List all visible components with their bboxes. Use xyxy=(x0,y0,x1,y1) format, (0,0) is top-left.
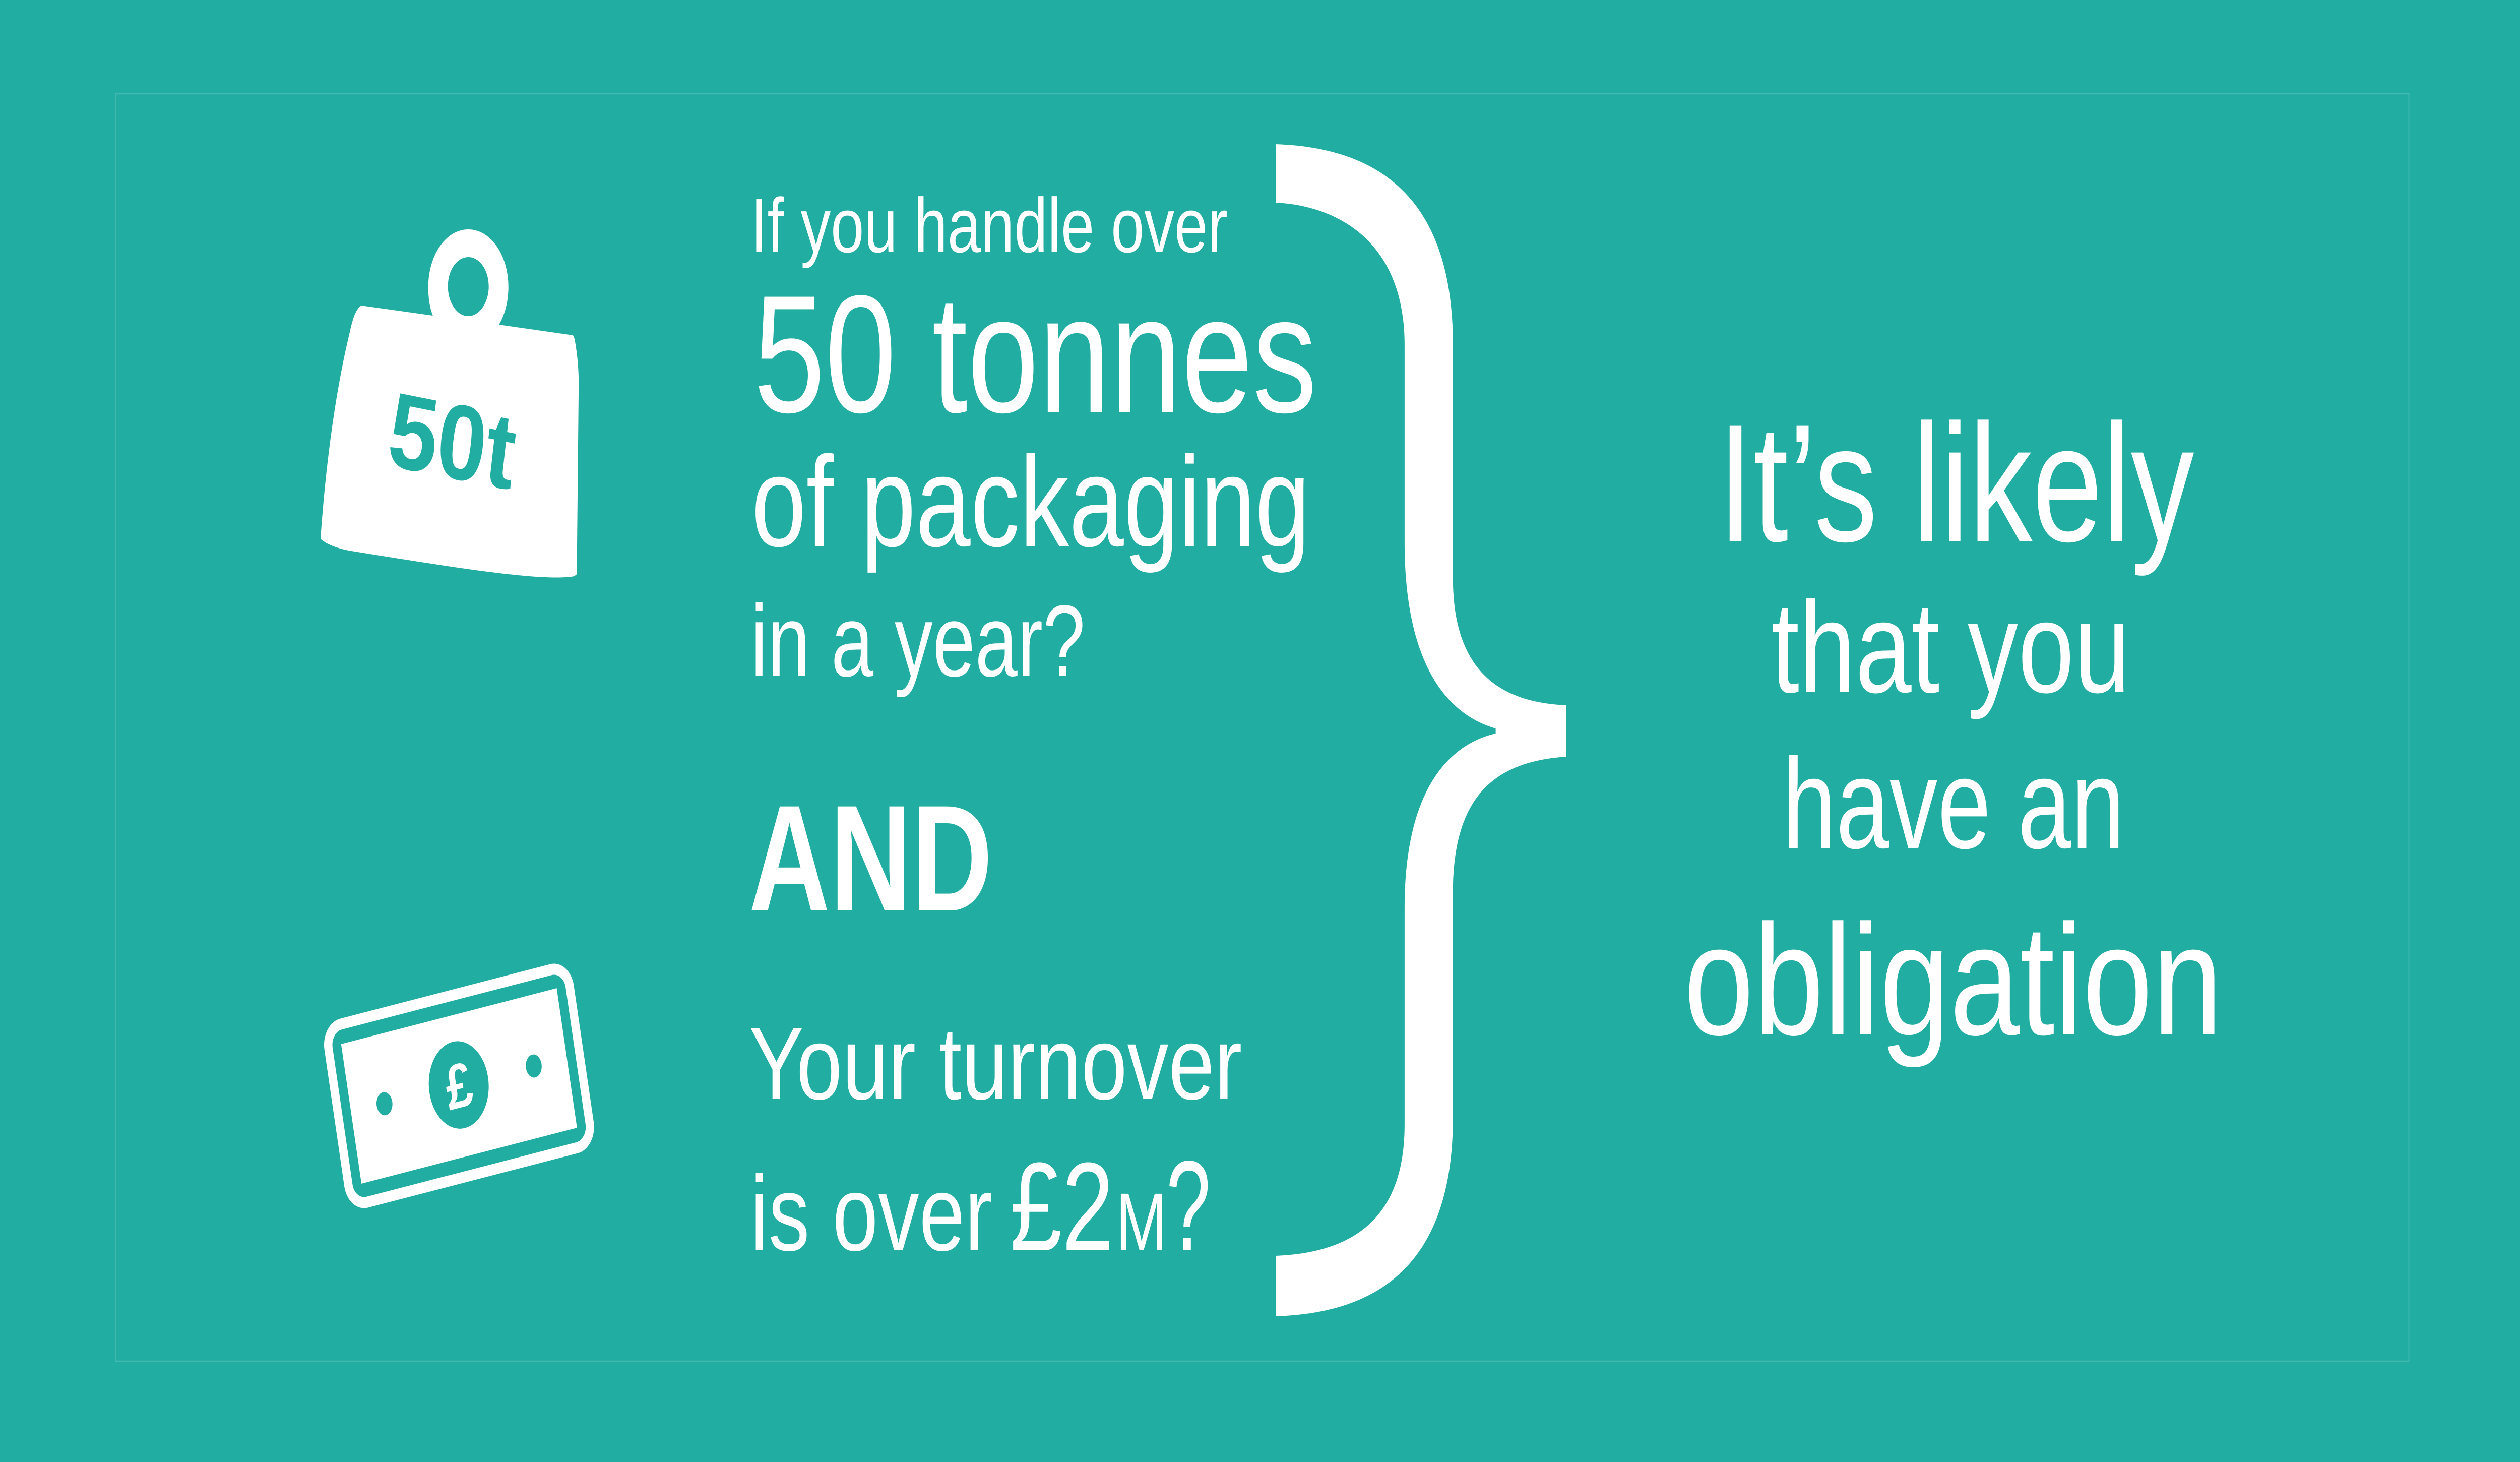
text block: turnover question: Your turnover xyxy=(749,1006,1242,1121)
text block: tonnage question xyxy=(750,182,1317,698)
text block: turnover question: is over xyxy=(750,1153,992,1273)
text block: conclusion: that you xyxy=(1771,575,2130,720)
text block: turnover question: M xyxy=(1116,1176,1167,1268)
text block: tonnage question: 50 tonnes xyxy=(753,261,1317,448)
text block: conclusion: obligation xyxy=(1684,892,2223,1069)
text block: conclusion: It’s likely xyxy=(1718,390,2194,578)
text block: tonnage question: of packaging xyxy=(751,430,1310,573)
text block: conclusion: have an xyxy=(1783,732,2125,875)
text block: tonnage question: If you handle over xyxy=(750,182,1228,269)
pound sign: £ xyxy=(441,1049,477,1124)
text block: turnover question: £2 xyxy=(1010,1136,1114,1277)
icon: 50 tonne weight xyxy=(321,229,579,577)
curly brace xyxy=(1276,144,1566,1316)
text block: tonnage question: in a year? xyxy=(750,584,1085,698)
text block: conclusion xyxy=(1684,390,2223,1069)
icon: banknote xyxy=(326,965,593,1206)
text block: turnover question: ? xyxy=(1166,1134,1211,1277)
text block: turnover question xyxy=(749,1006,1242,1277)
heading: AND: AND xyxy=(749,774,992,943)
icon label: 50t: 50t xyxy=(383,369,522,512)
